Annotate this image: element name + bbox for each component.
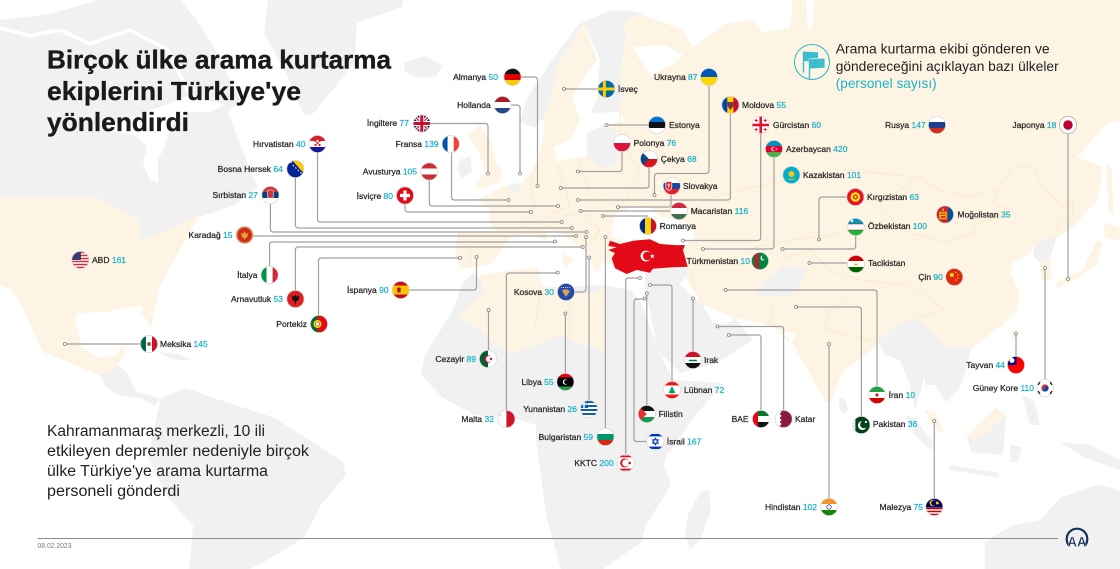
flag [420,162,438,180]
label: İsveç [618,84,638,94]
country: Güney Kore [973,266,1054,397]
label: Bosna Hersek 64 [218,164,283,174]
country: Sırbistan [213,186,588,234]
flag [596,428,614,446]
flag [308,135,326,153]
label: Azerbaycan 420 [786,144,848,154]
connector [716,325,784,410]
country: Irak [684,297,719,369]
country: Cezayir [435,308,497,368]
Turkey map with flag [608,239,688,274]
connector [564,312,567,373]
flag [751,252,769,270]
title: ekiplerini Türkiye'ye [47,76,301,106]
connector [579,210,670,212]
country: Bosna Hersek [218,160,573,230]
connector [616,195,671,208]
legend text [836,40,1059,91]
connector [562,88,598,90]
country: İngiltere [367,114,490,175]
country: İsrail [634,297,702,450]
country: Yunanistan [523,256,598,418]
label: Rusya 147 [885,120,926,130]
country: Filistin [638,292,683,423]
label: Macaristan 116 [691,206,748,216]
flag [494,96,512,114]
label: Malezya 75 [880,502,923,512]
icon: flags [794,44,830,80]
connector [576,114,730,202]
country: Macaristan [579,202,748,220]
flag [580,400,598,418]
flag [286,290,304,308]
connector [511,105,522,175]
country: Moğolistan [936,206,1011,224]
connector [604,236,607,428]
country: Hindistan [765,342,838,516]
label: İngiltere 77 [367,118,409,128]
label: Kosova 30 [514,287,554,297]
connector [588,256,590,400]
connector [781,236,856,250]
connector [645,292,648,405]
landmass: Java [949,465,999,478]
flag [928,116,946,134]
connector [605,124,648,126]
label: Japonya 18 [1012,120,1057,130]
flag [310,315,328,333]
country: Slovakya [616,177,718,208]
landmass: Africa [421,273,723,569]
flag [752,116,770,134]
label: Çekya 68 [661,154,697,164]
connector [295,178,573,230]
landmass: North Africa (Algeria, Libya) [459,267,605,355]
label: Hindistan 102 [765,502,817,512]
connector [576,152,622,173]
flag [396,186,414,204]
landmass: Arabia and Middle East [645,268,753,373]
connector [430,124,490,175]
connector [64,342,140,346]
country: Bulgaristan [539,236,614,446]
country: Türkmenistan [687,252,769,270]
label: Kırgızistan 63 [867,192,919,202]
country: Polonya [576,134,676,173]
title: Birçok ülke arama kurtarma [47,44,392,74]
label: Filistin [659,409,683,419]
label: Tayvan 44 [966,360,1005,370]
connector [521,77,539,188]
label: Moğolistan 35 [958,210,1011,220]
flag [479,350,497,368]
connector [702,158,774,250]
connector [794,306,861,416]
label: Yunanistan 26 [523,404,577,414]
country: Ukrayna [653,68,718,196]
connector [724,288,877,386]
country: Katar [716,325,815,428]
label: Lübnan 72 [684,385,724,395]
country borders [458,112,1073,342]
country: Portekiz [276,256,462,333]
connector [602,214,648,218]
label: Gürcistan 60 [773,120,821,130]
connector [574,236,588,292]
country: Gürcistan [682,116,821,242]
label: BAE [732,414,749,424]
description text: ülke Türkiye'ye arama kurtarma [47,463,268,480]
landmass: Australia [985,485,1120,569]
landmass: Norway and Finland [520,10,640,128]
legend text: (personel sayısı) [836,75,937,91]
country: Arnavutluk [231,246,584,308]
flag [497,410,515,428]
landmass: Iceland [404,56,443,78]
landmass: Ireland [457,156,472,178]
country: Lübnan [648,284,724,399]
landmass: Sri Lanka [839,398,848,413]
country: Fransa [396,135,510,202]
label: Hollanda [457,100,491,110]
connector [653,86,709,196]
flag [684,351,702,369]
title [47,44,392,137]
label: Tacikistan [868,258,906,268]
landmass: Madagascar [685,490,711,550]
flag [392,281,410,299]
connector [318,256,462,315]
country: Romanya [602,214,696,235]
label: Güney Kore 110 [973,383,1034,393]
country: İtalya [237,240,556,284]
flag [236,226,254,244]
country: Avusturya [363,162,560,208]
country: Tacikistan [808,255,906,273]
label: Sırbistan 27 [213,190,258,200]
label: Ukrayna 87 [654,72,698,82]
connector [818,197,847,241]
country: Azerbaycan [702,140,848,250]
country: Libya [521,312,574,391]
country: İspanya [347,256,478,299]
flag [936,206,954,224]
landmass: Benelux [507,183,523,194]
flag [140,335,158,353]
flag [846,188,864,206]
landmass: South Korea [1040,258,1053,282]
label: Çin 90 [918,272,943,282]
flag [721,96,739,114]
landmass: New Guinea [1060,442,1120,470]
landmass: Southeast Asia [878,318,971,410]
label: Kazakistan 101 [803,170,861,180]
connector [452,152,510,202]
label: Slovakya [683,181,718,191]
landmass: Central America [100,365,160,406]
connector [682,134,761,242]
water: Gulf of California [3,295,25,335]
connector [409,256,478,290]
label: İsviçre 80 [357,191,393,201]
landmass: Baltics and Belarus [587,125,617,168]
water: Black Sea [611,206,696,246]
connector [270,204,588,234]
landmass: Sumatra [905,415,935,450]
country: Tayvan [966,332,1025,374]
flag [640,150,658,168]
flag [1059,116,1077,134]
label: İtalya [237,270,258,280]
label: Bulgaristan 59 [539,432,593,442]
landmass: Canada [0,0,258,240]
country: İsviçre [357,186,532,214]
country: Kırgızistan [818,188,919,241]
label: Özbekistan 100 [868,221,927,231]
landmass: Morocco [453,273,483,315]
flag [71,251,89,269]
country: Çekya [559,150,697,190]
label: Almanya 50 [453,72,498,82]
connector [648,284,672,381]
label: KKTC 200 [574,458,614,468]
landmass: Borneo [967,408,1006,455]
label: Meksika 145 [160,339,208,349]
landmass: Sakhalin [1107,163,1113,213]
country: Çin [918,268,963,286]
description text: Kahramanmaraş merkezli, 10 ili [47,423,265,440]
landmass: Sweden [543,23,597,147]
label: Malta 32 [461,414,494,424]
flag [847,255,865,273]
landmass: Malaysian Borneo [967,408,1006,440]
water: Hudson Bay [100,95,225,183]
legend text: göndereceğini açıklayan bazı ülkeler [836,58,1059,74]
country: Estonya [605,116,700,134]
label: İran 10 [889,390,915,400]
label: Avusturya 105 [363,166,417,176]
flag [1036,379,1054,397]
flag [775,410,793,428]
country: Moldova [576,96,786,202]
flag [752,410,770,428]
connector [1066,134,1070,280]
connector [626,276,642,454]
label: Fransa 139 [396,139,439,149]
flag [646,432,664,450]
flag [413,114,431,132]
flag [613,134,631,152]
country: İsveç [562,80,638,98]
flag [638,405,656,423]
flag [504,68,522,86]
legend [794,40,1059,91]
flag [925,498,943,516]
legend text: Arama kurtarma ekibi gönderen ve [836,40,1050,56]
footer rule [38,538,1058,540]
connector [429,180,560,208]
connector [559,168,649,190]
connector [487,308,490,350]
country: Rusya [885,116,946,134]
label: İsrail 167 [667,436,702,446]
water: Ob Gulf [806,0,814,30]
landmass: United Kingdom [468,125,503,190]
connector [692,297,694,351]
date: 08.02.2023 [38,543,72,550]
connector [253,234,578,238]
landmass: USA and Mexico [0,197,200,375]
flag [765,140,783,158]
country: Japonya [1012,116,1077,281]
flag [286,160,304,178]
label: Türkmenistan 10 [687,256,750,266]
country: Kosova [514,236,588,301]
country: ABD [71,251,126,269]
landmass: Greenland [264,0,403,115]
landmass: Hokkaido [1103,222,1120,240]
label: Hırvatistan 40 [253,139,306,149]
flag [670,202,688,220]
country: İran [724,288,915,404]
connector [295,246,584,290]
title: yönlendirdi [47,107,189,137]
connector [270,240,556,266]
flag [261,186,279,204]
country: Malta [461,271,559,428]
flag [945,268,963,286]
label: ABD 161 [92,255,126,265]
label: Karadağ 15 [189,230,233,240]
connector [405,204,532,214]
label: Portekiz [276,319,307,329]
flag [648,116,666,134]
connector [1044,266,1046,379]
label: Moldova 55 [742,100,786,110]
water: Arctic channels [0,28,190,95]
landmass: Taiwan [1011,330,1017,340]
connector [1014,332,1018,356]
country: BAE [727,334,770,428]
connector [933,420,936,498]
landmass: Afghanistan [756,265,806,296]
label: Romanya [660,221,696,231]
flag [847,218,865,236]
landmass: Eurasia [455,0,1120,403]
flag [639,217,657,235]
water: White Sea [633,45,683,75]
flag [442,135,460,153]
label: İspanya 90 [347,285,389,295]
description text: etkileyen depremler nedeniyle birçok [47,443,309,460]
description text: personeli gönderdi [47,483,180,500]
country: Almanya [453,68,539,188]
landmass: Japan [1053,240,1103,290]
flag [556,373,574,391]
country: KKTC [574,276,642,472]
flag [700,68,718,86]
country: Hırvatistan [253,135,563,224]
flag [617,454,635,472]
connector [634,297,647,442]
landmass: Sulawesi [1010,445,1022,462]
landmass: South America [148,388,346,569]
country: Hollanda [457,96,522,175]
connector [727,334,761,410]
description text [47,423,309,500]
landmass: Cuba [160,352,192,360]
connector [506,271,559,410]
country: Karadağ [189,226,578,244]
label: Katar [795,414,815,424]
flag [782,166,800,184]
label: Arnavutluk 53 [231,294,283,304]
label: Cezayir 89 [435,354,476,364]
label: Pakistan 36 [873,419,918,429]
landmass: North Korea [1033,236,1057,263]
label: Polonya 76 [634,138,676,148]
country: Meksika [64,335,208,353]
flag [597,80,615,98]
connector [808,262,847,264]
country: Pakistan [794,306,918,434]
flag [663,381,681,399]
flag [820,498,838,516]
country: Malezya [880,420,943,516]
country: Özbekistan [781,218,927,250]
logo: AA: AA [1068,534,1086,550]
flag [852,416,870,434]
flag [557,283,575,301]
label: Irak [704,355,719,365]
label: Estonya [669,120,700,130]
flag [261,266,279,284]
flag [868,386,886,404]
connector [318,152,563,224]
landmass: Philippines [1022,395,1040,425]
landmass: Malaysia peninsula [924,410,944,433]
country: Kazakistan [782,166,861,184]
connector [828,342,830,498]
flag [1007,356,1025,374]
flag [663,177,681,195]
label: Libya 55 [521,377,554,387]
